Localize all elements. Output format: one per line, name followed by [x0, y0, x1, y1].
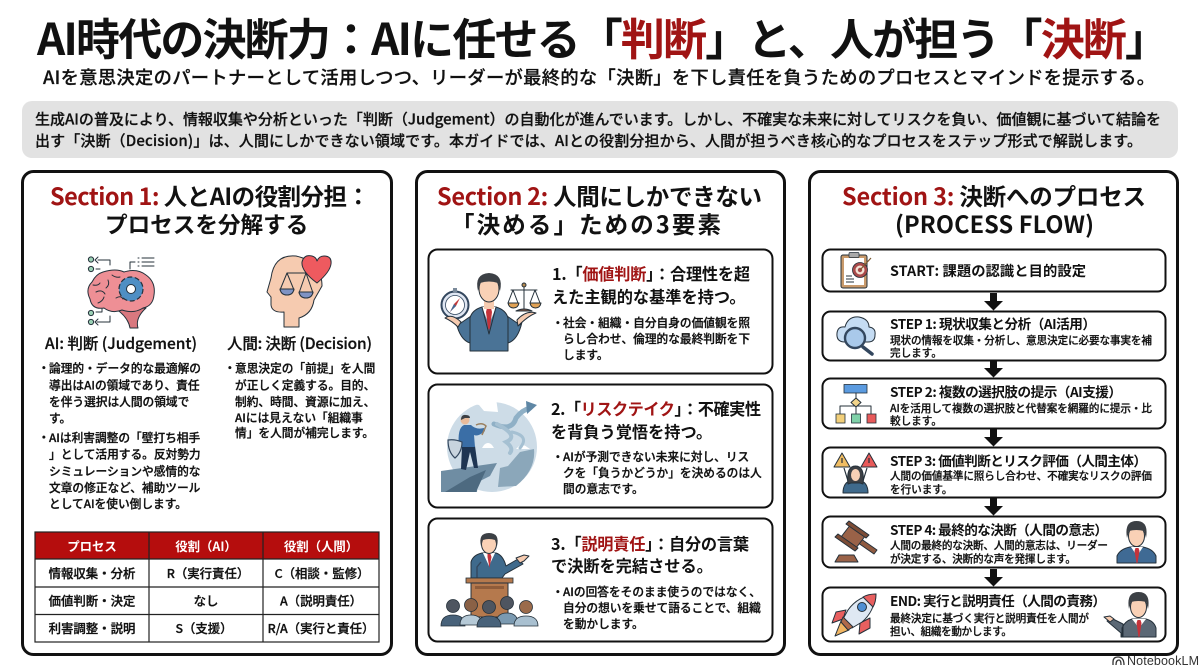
heading: section 3: Section 3: 決断へのプロセス — [842, 178, 1146, 212]
icon: human head with scales and heart — [267, 256, 331, 327]
text block: risk taking: ・ — [552, 448, 564, 465]
step: STEP 4 — [822, 516, 1166, 568]
table: RACI roles: 役割（人間） — [284, 537, 358, 555]
text block: value judgement — [552, 314, 750, 363]
panel: section 3 — [810, 172, 1178, 654]
NotebookLM logo: NotebookLM — [1127, 654, 1199, 668]
icon: person with warnings — [834, 453, 877, 493]
card: risk taking — [428, 384, 772, 508]
step: STEP 3 — [822, 448, 1166, 498]
heading: section 1: プロセスを分解する — [105, 207, 308, 240]
label: human decision: 人間: 決断 (Decision) — [227, 332, 372, 354]
text block: AI bullets: 導出はAIの領域であり、責任 — [49, 376, 200, 394]
panel: section 1 — [22, 172, 392, 654]
text block: accountability: AIの回答をそのまま使うのではなく、 — [563, 583, 761, 600]
heading: section 2: 「決める」ための3要素 — [451, 206, 721, 240]
icon: businessman with compass and scales — [442, 273, 541, 351]
step: STEP 3: 人間の価値基準に照らし合わせ、不確実なリスクの評価 — [890, 468, 1152, 484]
table: RACI roles — [35, 532, 379, 642]
step: STEP 3: STEP 3: 価値判断とリスク評価（人間主体） — [890, 450, 1147, 470]
text block: risk taking — [552, 448, 762, 497]
text block: human bullets: 意思決定の「前提」を人間 — [235, 360, 375, 376]
table: RACI roles: 価値判断・決定 — [49, 592, 135, 610]
intro text block: 出す「決断（Decision)」は、人間にしかできない領域です。本ガイドでは、AIとの役割分担から、人間が担うべき核心的なプロセスをステップ形式で解説します。 — [35, 130, 1142, 151]
text block: AI bullets: シミュレーションや感情的な — [49, 462, 200, 480]
arrows: process flow — [984, 293, 1003, 586]
step: END — [822, 588, 1166, 642]
icon: businessman gesturing — [1104, 592, 1156, 637]
text block: accountability: 自分の想いを乗せて語ることで、組織 — [563, 599, 761, 616]
heading: section 3: (PROCESS FLOW) — [895, 206, 1094, 240]
step: STEP 2: STEP 2: 複数の選択肢の提示（AI支援） — [890, 381, 1122, 401]
step: END: END: 実行と説明責任（人間の責務） — [890, 590, 1106, 610]
step: END: 最終決定に基づく実行と説明責任を人間が — [890, 611, 1089, 626]
heading: risk taking: を背負う覚悟を持つ。 — [551, 419, 712, 443]
step: STEP 4: STEP 4: 最終的な決断（人間の意志） — [890, 519, 1108, 539]
table: RACI roles: R（実行責任） — [167, 564, 249, 582]
heading: section 1: Section 1: 人とAIの役割分担： — [50, 178, 370, 212]
step: STEP 4: 人間の最終的な決断、人間的意志は、リーダー — [890, 538, 1108, 553]
text block: accountability: ・ — [552, 583, 564, 600]
intro text block — [22, 101, 1178, 158]
text block: human bullets: ・ — [224, 359, 236, 376]
step: STEP 1: STEP 1: 現状収集と分析（AI活用） — [890, 313, 1096, 333]
icon: rocket — [832, 594, 876, 636]
heading: accountability: 3.「説明責任」：自分の言葉 — [551, 531, 749, 555]
text block: human bullets: AIには見えない「組織事 — [235, 409, 363, 426]
text block: risk taking: クを「負うかどうか」を決めるのは人 — [563, 464, 762, 481]
card: value judgement — [428, 250, 772, 374]
step: STEP 1: 現状の情報を収集・分析し、意思決定に必要な事実を補 — [890, 333, 1152, 348]
table: RACI roles: 情報収集・分析 — [49, 564, 135, 582]
icon: AI brain — [88, 257, 154, 328]
heading: value judgement: えた主観的な基準を持つ。 — [552, 284, 746, 308]
step: STEP 2: AIを活用して複数の選択肢と代替案を網羅的に提示・比 — [890, 401, 1152, 416]
icon: man on cliff facing path — [441, 398, 537, 492]
heading: accountability: で決断を完結させる。 — [551, 553, 713, 577]
heading: value judgement — [552, 261, 750, 308]
card: accountability — [428, 518, 772, 642]
text block: risk taking: AIが予測できない未来に対し、リス — [563, 448, 749, 465]
step: START: START: 課題の認識と目的設定 — [890, 260, 1086, 281]
step: STEP 2 — [822, 378, 1166, 428]
table: RACI roles: R/A（実行と責任） — [268, 619, 374, 637]
table: RACI roles: S（支援） — [175, 619, 233, 637]
text block: AI bullets: としてAIを使い倒します。 — [49, 495, 187, 512]
heading: risk taking: 2.「リスクテイク」：不確実性 — [551, 396, 761, 420]
text block: value judgement: します。 — [563, 346, 609, 363]
text block: AI bullets: 文章の修正など、補助ツール — [49, 479, 201, 496]
text block: human bullets: が正しく定義する。目的、 — [235, 376, 375, 394]
table: RACI roles: A（説明責任） — [280, 592, 362, 610]
heading: section 3 — [842, 178, 1146, 240]
heading: value judgement: 1.「価値判断」：合理性を超 — [552, 261, 750, 285]
text block: AI bullets: を伴う選択は人間の領域で — [49, 393, 189, 410]
step: STEP 4: が決定する、決断的な声を発揮します。 — [890, 552, 1076, 566]
text block: accountability: を動かします。 — [563, 615, 644, 632]
icon: businessman — [1117, 521, 1156, 563]
step: STEP 1: 完します。 — [890, 346, 942, 360]
heading: accountability — [551, 531, 749, 577]
title: AI時代の決断力：AIに任せる「判断」と、人が担う「決断」 — [36, 4, 1169, 68]
text block: human bullets: 情」を人間が補完します。 — [235, 424, 374, 441]
text block: AI bullets: AIは利害調整の「壁打ち相手 — [49, 429, 200, 446]
table: RACI roles: プロセス — [67, 537, 117, 555]
step: STEP 1 — [822, 312, 1166, 360]
icon: flowchart — [836, 384, 876, 423]
step: STEP 3: を行います。 — [890, 482, 953, 497]
text block: value judgement: 社会・組織・自分自身の価値観を照 — [563, 314, 750, 331]
text block: value judgement: ・ — [552, 314, 564, 331]
step: STEP 2: 較します。 — [890, 414, 942, 428]
text block: AI bullets: ・ — [38, 428, 50, 446]
icon: gavel — [835, 521, 877, 562]
text block: AI bullets: 論理的・データ的な最適解の — [49, 360, 201, 376]
table: RACI roles: 利害調整・説明 — [49, 619, 135, 637]
heading: section 2 — [437, 178, 762, 240]
text block: AI bullets: ・ — [38, 359, 50, 376]
text block: human bullets: 制約、時間、資源に加え、 — [235, 393, 375, 410]
text block: accountability — [552, 583, 761, 632]
text block: AI bullets: す。 — [49, 410, 71, 426]
icon: cloud and magnifier — [837, 317, 875, 354]
heading: section 1 — [50, 178, 370, 240]
step: START — [822, 250, 1166, 292]
heading: section 2: Section 2: 人間にしかできない — [437, 178, 762, 212]
step: END: 担い、組織を動かします。 — [890, 624, 1012, 639]
intro text block: 生成AIの普及により、情報収集や分析といった「判断（Judgement）の自動化が進んでいます。しかし、不確実な未来に対してリスクを負い、価値観に基づいて結論を — [35, 108, 1161, 130]
heading: risk taking — [551, 396, 761, 443]
text block: AI bullets — [38, 359, 201, 512]
label: AI judgement: AI: 判断 (Judgement) — [45, 332, 197, 354]
icon: speaker at podium with audience — [441, 533, 538, 627]
table: RACI roles: C（相談・監修） — [275, 564, 369, 582]
subtitle: AIを意思決定のパートナーとして活用しつつ、リーダーが最終的な「決断」を下し責任を負うためのプロセスとマインドを提示する。 — [43, 64, 1155, 90]
table: RACI roles: なし — [194, 592, 218, 610]
panel: section 2 — [416, 172, 784, 654]
text block: human bullets — [224, 359, 375, 441]
text block: AI bullets: 」として活用する。反対勢力 — [49, 446, 201, 462]
text block: risk taking: 間の意志です。 — [563, 480, 644, 497]
table: RACI roles: 役割（AI） — [175, 537, 237, 555]
text block: value judgement: らし合わせ、倫理的な最終判断を下 — [563, 330, 750, 347]
icon: clipboard with target — [841, 252, 871, 288]
